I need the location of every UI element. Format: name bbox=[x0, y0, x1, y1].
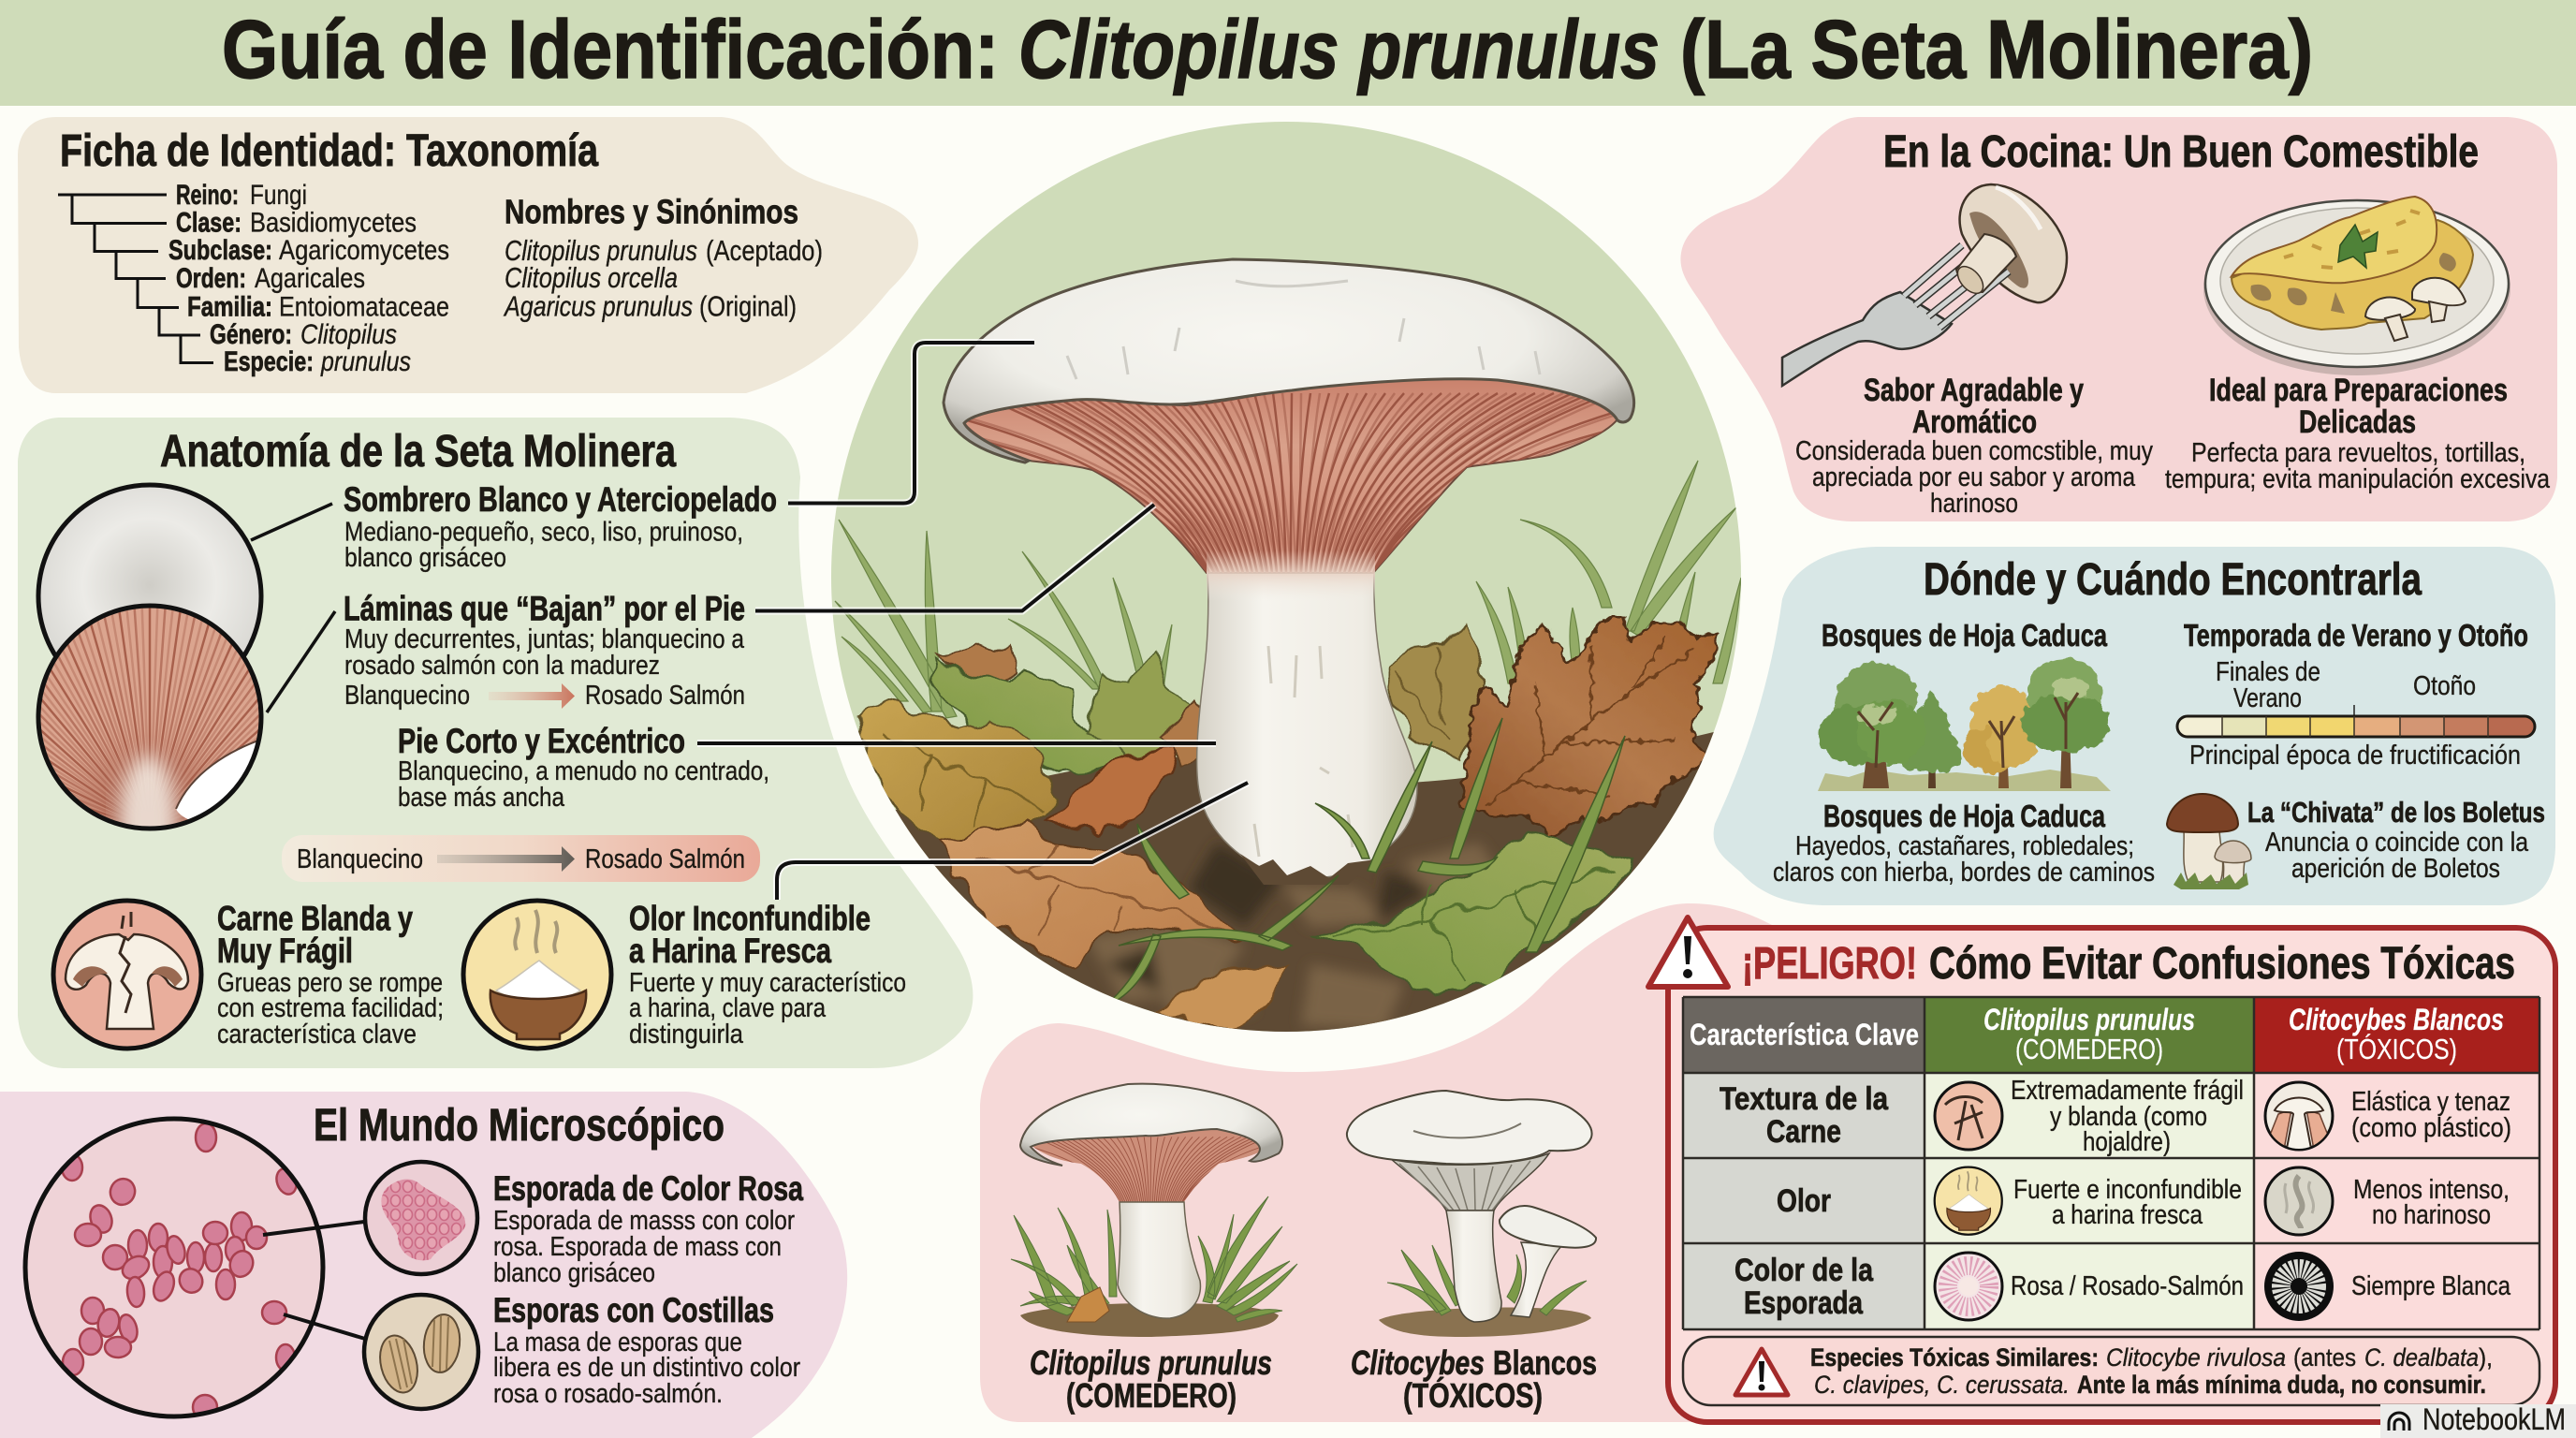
warning box: similar toxic species bbox=[1683, 1337, 2539, 1405]
panel: habitat and season bbox=[1714, 547, 2555, 905]
text: spore print bbox=[493, 1169, 803, 1288]
colour change pill bbox=[282, 835, 760, 882]
taxonomy ranks: Clase: bbox=[176, 208, 242, 238]
zoom circle: cap surface bbox=[38, 485, 261, 708]
edible mushroom cap bbox=[1020, 1084, 1282, 1166]
text: gills bbox=[344, 590, 745, 711]
text: flour smell: Olor Inconfundible bbox=[629, 899, 871, 938]
caption: fruiting season: Principal época de fructificación bbox=[2189, 741, 2521, 770]
text: flavour bbox=[1795, 373, 2153, 519]
table header: (COMEDERO) bbox=[2015, 1033, 2163, 1065]
names and synonyms bbox=[503, 193, 823, 322]
cap centre dip bbox=[1413, 1123, 1521, 1137]
text: flavour: apreciada por eu sabor y aroma bbox=[1812, 462, 2136, 492]
soil bbox=[895, 732, 1714, 1032]
leader line: cap bbox=[788, 343, 1034, 504]
foreground leaves bbox=[1461, 619, 1719, 839]
text: ribbed spores bbox=[493, 1291, 800, 1409]
text: gills: Láminas que “Bajan” por el Pie bbox=[344, 590, 745, 627]
table header: Clitopilus prunulus bbox=[1983, 1003, 2195, 1036]
text: flour smell bbox=[629, 899, 906, 1049]
icon: faint smell table bbox=[2265, 1167, 2333, 1235]
comparison table bbox=[1683, 997, 2539, 1329]
label: edible bbox=[1030, 1343, 1272, 1415]
table header: Clitocybes Blancos bbox=[2289, 1003, 2504, 1036]
text: flour smell: Fuerte y muy característico bbox=[629, 968, 906, 998]
taxonomy ranks: Especie: bbox=[224, 346, 314, 377]
names and synonyms: Nombres y Sinónimos bbox=[505, 193, 798, 230]
table text: edible column: hojaldre) bbox=[2083, 1127, 2171, 1157]
central illustration bbox=[824, 122, 1760, 1039]
panel: danger bbox=[1648, 917, 2555, 1422]
stem top colour fade bbox=[1207, 550, 1375, 601]
text: ribbed spores: libera es de un distintivo color bbox=[493, 1353, 800, 1383]
row label: texture bbox=[1720, 1081, 1889, 1150]
table header bbox=[1683, 997, 2539, 1073]
text: fragile flesh: Muy Frágil bbox=[217, 932, 353, 970]
text: forests: Bosques de Hoja Caduca bbox=[1823, 799, 2105, 833]
warning box: similar toxic species: Especies Tóxicas Similares: bbox=[1810, 1343, 2099, 1372]
text: stem: Blanquecino, a menudo no centrado, bbox=[398, 756, 769, 786]
text: fragile flesh: Grueas pero se rompe bbox=[217, 968, 443, 998]
table text: edible column bbox=[2011, 1076, 2244, 1301]
text: cap bbox=[344, 480, 777, 573]
text: fragile flesh: característica clave bbox=[217, 1020, 417, 1049]
table cell backgrounds bbox=[1683, 997, 2539, 1329]
subheading: forests: Bosques de Hoja Caduca bbox=[1822, 618, 2107, 653]
warning box: similar toxic species: C. dealbata bbox=[2364, 1343, 2479, 1372]
text: spore print: blanco grisáceo bbox=[493, 1258, 655, 1288]
title band: Guía de Identificación: bbox=[222, 3, 999, 95]
taxonomy ranks: Fungi bbox=[250, 180, 307, 211]
text: preparations: Delicadas bbox=[2299, 404, 2416, 440]
text: gills: Rosado Salmón bbox=[585, 681, 745, 711]
ribbed spores circle bbox=[364, 1295, 478, 1409]
leader line: gills zoom bbox=[267, 611, 335, 712]
text: boletus bbox=[2247, 796, 2545, 884]
icon: fragile table bbox=[1935, 1082, 2002, 1150]
taxonomy ranks: Subclase: bbox=[168, 235, 272, 266]
text: preparations: Ideal para Preparaciones bbox=[2209, 373, 2508, 408]
text: flavour: Considerada buen comcstible, muy bbox=[1795, 436, 2153, 466]
icon: trees bbox=[1818, 659, 2111, 791]
text: preparations: Perfecta para revueltos, tortillas, bbox=[2191, 438, 2525, 468]
taxonomy ranks: Basidiomycetes bbox=[250, 208, 417, 238]
text: flavour: Sabor Agradable y bbox=[1864, 373, 2084, 408]
taxonomy tree lines bbox=[58, 195, 213, 363]
edible mushroom stem bbox=[1118, 1202, 1200, 1318]
cap bbox=[944, 259, 1634, 462]
warning box: similar toxic species: Ante la más mínima duda, no consumir. bbox=[2077, 1371, 2486, 1399]
season labels: Finales de bbox=[2216, 657, 2320, 687]
table text: toxic column: Siempre Blanca bbox=[2351, 1271, 2511, 1301]
panel: pink comparison background bbox=[980, 903, 1772, 1422]
text: cap: blanco grisáceo bbox=[344, 543, 506, 573]
taxonomy ranks: prunulus bbox=[320, 346, 411, 377]
connector to spore print bbox=[263, 1222, 364, 1235]
warning box: similar toxic species: C. clavipes, C. cerussata. bbox=[1814, 1371, 2070, 1399]
icon: boletus bbox=[2167, 794, 2251, 889]
warning box: similar toxic species: ), bbox=[2479, 1343, 2493, 1372]
icon: warning triangle bbox=[1648, 917, 1728, 987]
leader line: cap zoom bbox=[251, 504, 332, 540]
colour change pill: Rosado Salmón bbox=[585, 844, 745, 874]
panel: kitchen bbox=[1680, 117, 2557, 521]
table header: (TÓXICOS) bbox=[2336, 1033, 2457, 1065]
row label: texture: Carne bbox=[1766, 1114, 1841, 1150]
title band: (La Seta Molinera) bbox=[1680, 3, 2313, 95]
label: toxic: Clitocybes bbox=[1351, 1343, 1485, 1382]
icon: fork with mushroom bbox=[1782, 184, 2067, 386]
text: gills: rosado salmón con la madurez bbox=[344, 651, 660, 681]
text: fragile flesh: con estrema facilidad; bbox=[217, 993, 444, 1023]
heading: danger: ¡PELIGRO! bbox=[1742, 939, 1917, 989]
text: ribbed spores: La masa de esporas que bbox=[493, 1328, 742, 1357]
spore print circle bbox=[365, 1162, 477, 1274]
season bar bbox=[2177, 705, 2535, 737]
title band bbox=[0, 0, 2576, 106]
large toxic gills bbox=[1390, 1153, 1549, 1211]
taxonomy ranks: Agaricales bbox=[255, 263, 365, 294]
text: flour smell: distinguirla bbox=[629, 1020, 744, 1049]
label: toxic: (TÓXICOS) bbox=[1403, 1375, 1543, 1415]
text: flavour: Aromático bbox=[1912, 404, 2037, 440]
table text: edible column: Extremadamente frágil bbox=[2011, 1076, 2244, 1106]
text: flour smell: a harina, clave para bbox=[629, 993, 827, 1023]
text: spore print: Esporada de Color Rosa bbox=[493, 1169, 803, 1208]
text: spore print: Esporada de masss con color bbox=[493, 1206, 795, 1236]
leader line: gills bbox=[755, 505, 1154, 610]
table text: edible column: a harina fresca bbox=[2052, 1200, 2203, 1230]
panel: taxonomy bbox=[18, 117, 918, 393]
label: edible: Clitopilus prunulus bbox=[1030, 1343, 1272, 1382]
text: flavour: harinoso bbox=[1930, 489, 2018, 519]
gill lines bbox=[1399, 1161, 1530, 1211]
background leaves bbox=[858, 624, 1485, 842]
row label: smell: Olor bbox=[1777, 1183, 1831, 1219]
microscope view bbox=[25, 1119, 323, 1419]
text: fragile flesh bbox=[217, 899, 444, 1049]
names and synonyms: (Original) bbox=[699, 290, 797, 322]
table text: toxic column: Elástica y tenaz bbox=[2351, 1087, 2510, 1117]
season labels: Otoño bbox=[2413, 671, 2476, 701]
taxonomy ranks bbox=[168, 180, 449, 377]
stem base crumbs bbox=[1240, 854, 1376, 885]
heading: taxonomy: Ficha de Identidad: Taxonomía bbox=[60, 126, 598, 176]
names and synonyms: Clitopilus orcella bbox=[505, 261, 678, 294]
taxonomy ranks: Agaricomycetes bbox=[279, 235, 449, 266]
text: spore print: rosa. Esporada de mass con bbox=[493, 1232, 782, 1262]
text: stem bbox=[398, 722, 769, 813]
colour change pill: Blanquecino bbox=[297, 844, 423, 874]
soil patches bbox=[1086, 843, 1498, 1030]
table text: edible column: Fuerte e inconfundible bbox=[2013, 1175, 2242, 1205]
zoom circle: gills bbox=[36, 603, 264, 831]
label: edible: (COMEDERO) bbox=[1066, 1376, 1237, 1415]
text: ribbed spores: Esporas con Costillas bbox=[493, 1291, 774, 1329]
taxonomy ranks: Clitopilus bbox=[300, 319, 397, 350]
grass behind mushroom bbox=[835, 461, 1741, 718]
icon: rubbery table bbox=[2265, 1082, 2333, 1153]
text: gills: Muy decurrentes, juntas; blanquecino a bbox=[344, 624, 745, 654]
leader line: stem bbox=[697, 740, 1216, 747]
toxic soil and grass bbox=[1379, 1245, 1591, 1337]
leader line: flesh base bbox=[777, 783, 1248, 900]
names and synonyms: Agaricus prunulus bbox=[503, 290, 693, 322]
heading: microscopic: El Mundo Microscópico bbox=[314, 1101, 724, 1151]
names and synonyms: (Aceptado) bbox=[706, 234, 823, 267]
panel: anatomy bbox=[0, 418, 973, 1068]
edible mushroom soil and grass bbox=[1011, 1196, 1297, 1337]
warning box: similar toxic species: (antes bbox=[2293, 1343, 2356, 1372]
season labels bbox=[2216, 657, 2476, 713]
row label: spore colour: Color de la bbox=[1734, 1253, 1874, 1288]
taxonomy ranks: Entoiomataceae bbox=[279, 292, 449, 322]
icon: flour smell table bbox=[1935, 1167, 2002, 1235]
text: forests bbox=[1773, 799, 2155, 888]
warning box: similar toxic species: Clitocybe rivulosa bbox=[2106, 1343, 2286, 1372]
text: ribbed spores: rosa o rosado-salmón. bbox=[493, 1379, 723, 1409]
taxonomy ranks: Reino: bbox=[176, 180, 239, 211]
text: boletus: aperición de Boletos bbox=[2291, 854, 2500, 884]
text: cap: Mediano-pequeño, seco, liso, pruinoso, bbox=[344, 517, 743, 547]
text: flour smell: a Harina Fresca bbox=[629, 932, 831, 970]
taxonomy ranks: Orden: bbox=[176, 263, 246, 294]
connector to ribbed spores bbox=[284, 1314, 365, 1339]
table text: edible column: y blanda (como bbox=[2050, 1102, 2207, 1132]
stem bbox=[1197, 573, 1417, 878]
icon: white spore print bbox=[2264, 1252, 2334, 1321]
icon: flour bowl bbox=[463, 901, 611, 1049]
table text: edible column: Rosa / Rosado-Salmón bbox=[2011, 1271, 2244, 1301]
taxonomy ranks: Familia: bbox=[187, 292, 272, 322]
text: stem: base más ancha bbox=[398, 783, 565, 813]
small toxic cap bbox=[1500, 1206, 1596, 1248]
heading: anatomy: Anatomía de la Seta Molinera bbox=[160, 427, 676, 477]
text: stem: Pie Corto y Excéntrico bbox=[398, 722, 685, 760]
title band: Clitopilus prunulus bbox=[1018, 3, 1660, 95]
icon: pink spore print bbox=[1935, 1253, 2002, 1320]
cap texture bbox=[1067, 281, 1540, 379]
gills bbox=[966, 380, 1617, 574]
edible mushroom gills bbox=[1033, 1130, 1259, 1202]
large toxic stem bbox=[1446, 1211, 1501, 1322]
table text: toxic column bbox=[2351, 1087, 2511, 1301]
text: boletus: Anuncia o coincide con la bbox=[2265, 828, 2529, 858]
row label: spore colour: Esporada bbox=[1744, 1285, 1864, 1321]
heading: habitat: Dónde y Cuándo Encontrarla bbox=[1924, 555, 2422, 605]
names and synonyms: Clitopilus prunulus bbox=[505, 234, 697, 267]
text: fragile flesh: Carne Blanda y bbox=[217, 899, 413, 938]
icon: small warning triangle bbox=[1735, 1349, 1788, 1395]
season labels: Verano bbox=[2233, 683, 2302, 713]
row label: texture: Textura de la bbox=[1720, 1081, 1889, 1117]
table text: toxic column: no harinoso bbox=[2372, 1200, 2491, 1230]
icon: fragile flesh bbox=[53, 901, 201, 1049]
large toxic cap bbox=[1347, 1091, 1592, 1164]
small toxic stem bbox=[1511, 1242, 1562, 1317]
text: preparations bbox=[2165, 373, 2551, 494]
text: gills: Blanquecino bbox=[344, 681, 470, 711]
table header: Característica Clave bbox=[1690, 1018, 1919, 1051]
text: forests: Hayedos, castañares, robledales; bbox=[1795, 831, 2134, 861]
panel: microscopic world bbox=[0, 1092, 847, 1438]
text: cap: Sombrero Blanco y Aterciopelado bbox=[344, 480, 777, 519]
label: toxic bbox=[1351, 1343, 1597, 1415]
foreground grass bbox=[1105, 718, 1625, 1006]
comparison: edible mushroom bbox=[1011, 1084, 1297, 1337]
icon: omelette plate bbox=[2203, 197, 2510, 375]
stem texture bbox=[1254, 646, 1353, 857]
taxonomy ranks: Género: bbox=[210, 319, 292, 350]
label: toxic: Blancos bbox=[1493, 1343, 1597, 1382]
table text: toxic column: Menos intenso, bbox=[2353, 1175, 2510, 1205]
row label: spore colour bbox=[1734, 1253, 1874, 1321]
comparison: toxic mushrooms bbox=[1347, 1091, 1596, 1337]
table text: toxic column: (como plástico) bbox=[2351, 1113, 2511, 1143]
text: forests: claros con hierba, bordes de caminos bbox=[1773, 858, 2155, 888]
